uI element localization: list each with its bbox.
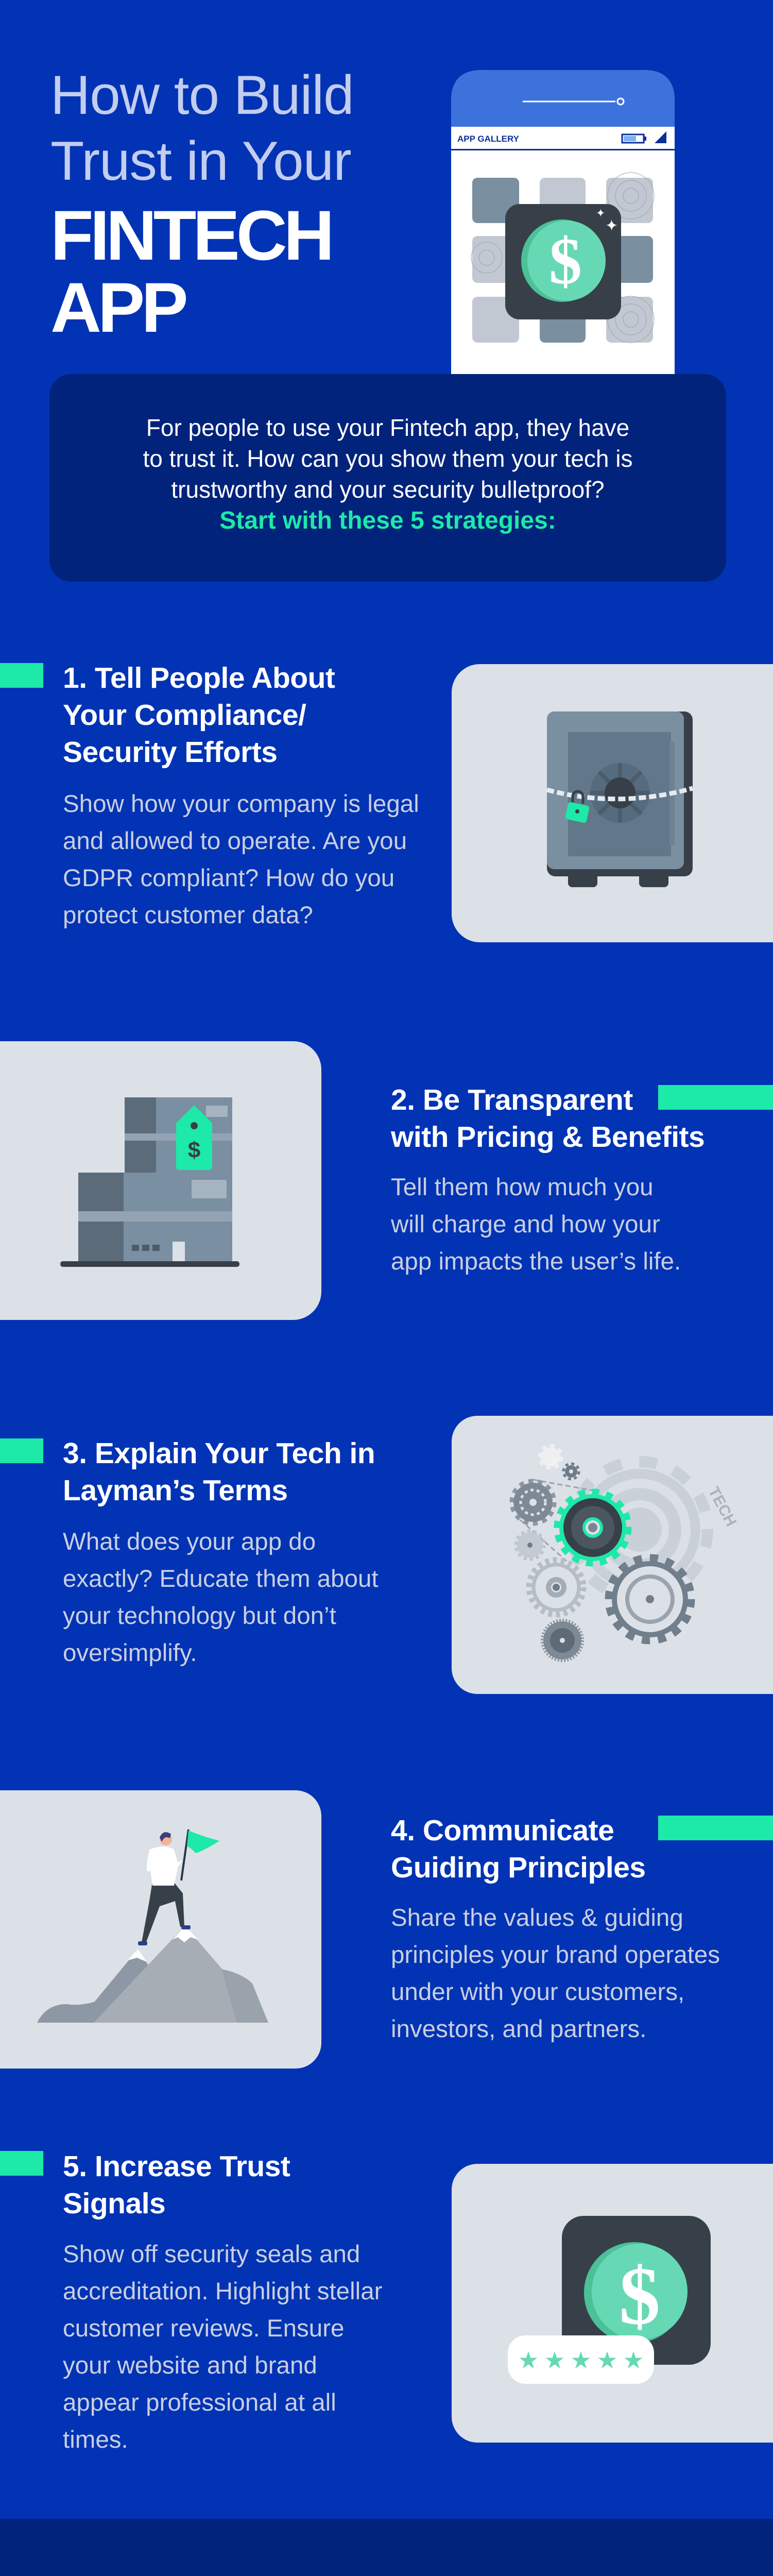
body 5: accreditation. Highlight stellar	[63, 2278, 382, 2305]
heading 5: 5. Increase Trust	[63, 2150, 290, 2183]
body 2	[391, 1174, 681, 1275]
panel: safe illustration	[452, 664, 773, 942]
body 4: under with your customers,	[391, 1978, 684, 2006]
title: FINTECH	[50, 196, 331, 275]
intro text: For people to use your Fintech app, they have	[146, 414, 629, 441]
heading 2	[390, 1083, 705, 1154]
body 1: protect customer data?	[63, 902, 313, 929]
heading 4: Guiding Principles	[391, 1851, 646, 1884]
heading 1: 1. Tell People About	[63, 662, 335, 694]
icon: gears	[510, 1445, 740, 1662]
body 5: customer reviews. Ensure	[63, 2315, 344, 2342]
panel: gears	[452, 1416, 773, 1694]
body 1: GDPR compliant? How do you	[63, 865, 394, 892]
body 1	[63, 790, 419, 929]
title: Trust in Your	[50, 130, 351, 192]
body 2: app impacts the user’s life.	[391, 1248, 681, 1275]
heading 5: Signals	[63, 2187, 165, 2220]
panel: rated app icon	[452, 2164, 773, 2443]
intro text: trustworthy and your security bulletproof?	[171, 476, 605, 503]
body 4: principles your brand operates	[391, 1941, 720, 1969]
heading 3	[63, 1437, 375, 1507]
section 5	[0, 2150, 773, 2453]
body 1: Show how your company is legal	[63, 790, 419, 818]
section 1	[0, 662, 773, 942]
body 2: Tell them how much you	[391, 1174, 654, 1201]
body 3	[63, 1528, 379, 1667]
body 2: will charge and how your	[391, 1211, 660, 1238]
body 4: investors, and partners.	[391, 2015, 646, 2043]
title: APP	[50, 268, 185, 347]
heading 1	[63, 662, 335, 769]
body 4	[391, 1904, 720, 2043]
body 5	[63, 2241, 382, 2453]
panel: boxes with price tag	[0, 1041, 321, 1320]
icon: coin app with 5-star rating: ★	[570, 2346, 592, 2374]
body 3: your technology but don’t	[63, 1602, 336, 1630]
heading 4	[391, 1814, 646, 1884]
accent bar	[658, 1085, 773, 1110]
heading 2: 2. Be Transparent	[391, 1083, 633, 1116]
icon: coin app with 5-star rating: ★	[518, 2346, 539, 2374]
body 1: and allowed to operate. Are you	[63, 827, 407, 855]
title: How to Build	[50, 64, 354, 126]
heading 3: 3. Explain Your Tech in	[63, 1437, 375, 1470]
icon: coin app with 5-star rating: $	[619, 2250, 660, 2342]
icon: person on mountain with flag	[37, 1829, 268, 2023]
intro box	[49, 374, 726, 582]
illustration: phone app gallery	[451, 70, 675, 374]
icon: boxes and price tag	[60, 1097, 239, 1267]
section 2	[0, 1041, 773, 1320]
icon: locked safe	[546, 711, 693, 887]
icon: coin app with 5-star rating	[508, 2216, 711, 2384]
heading 2: with Pricing & Benefits	[391, 1121, 705, 1154]
illustration: phone app gallery: ✦	[596, 207, 605, 219]
body 3: What does your app do	[63, 1528, 316, 1555]
body 5: Show off security seals and	[63, 2241, 360, 2268]
heading 1: Your Compliance/	[63, 699, 306, 732]
title	[50, 64, 354, 347]
heading 1: Security Efforts	[63, 736, 277, 769]
body 3: oversimplify.	[63, 1639, 197, 1667]
illustration: phone app gallery: $	[549, 225, 582, 298]
panel: mountain	[0, 1790, 321, 2069]
icon: coin app with 5-star rating: ★	[596, 2346, 618, 2374]
section 3	[0, 1416, 773, 1694]
body 5: your website and brand	[63, 2352, 317, 2379]
icon: boxes and price tag: $	[188, 1138, 200, 1163]
accent bar	[0, 2151, 43, 2176]
heading 5	[63, 2150, 290, 2220]
illustration: phone app gallery: ✦	[605, 217, 618, 234]
intro text: to trust it. How can you show them your tech is	[143, 445, 633, 472]
accent bar	[0, 663, 43, 688]
body 4: Share the values & guiding	[391, 1904, 683, 1931]
icon: coin app with 5-star rating: ★	[623, 2346, 644, 2374]
body 3: exactly? Educate them about	[63, 1565, 379, 1592]
icon: coin app with 5-star rating: ★	[544, 2346, 565, 2374]
section 4	[0, 1790, 773, 2069]
intro text	[143, 414, 633, 534]
body 5: times.	[63, 2426, 128, 2453]
icon: gears: TECH	[705, 1484, 740, 1529]
accent bar	[0, 1438, 43, 1463]
intro text: Start with these 5 strategies:	[219, 507, 556, 534]
heading 4: 4. Communicate	[391, 1814, 614, 1847]
body 5: appear professional at all	[63, 2389, 336, 2416]
heading 3: Layman’s Terms	[63, 1474, 288, 1507]
illustration: phone app gallery: APP GALLERY	[457, 134, 520, 144]
footer	[0, 2519, 773, 2576]
accent bar	[658, 1816, 773, 1840]
